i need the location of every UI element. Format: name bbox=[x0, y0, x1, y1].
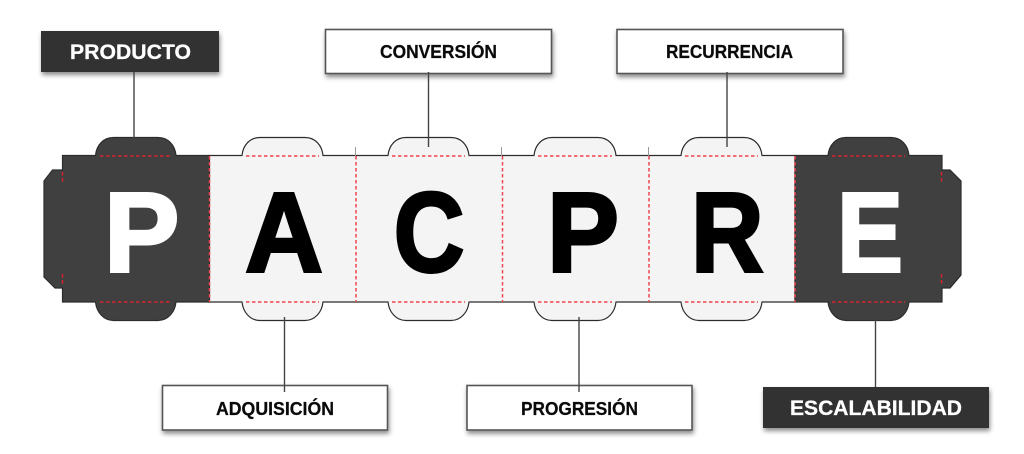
leader: ESCALABILIDAD bbox=[874, 318, 876, 387]
panel: dark right section E bbox=[795, 138, 961, 320]
label: RECURRENCIA: RECURRENCIA bbox=[666, 42, 793, 62]
letter A: A bbox=[245, 170, 323, 296]
label: ESCALABILIDAD: ESCALABILIDAD bbox=[790, 397, 962, 420]
label: PRODUCTO bbox=[41, 31, 219, 72]
label: ESCALABILIDAD bbox=[763, 387, 989, 428]
letter E: E bbox=[837, 170, 903, 296]
letter P: P bbox=[547, 170, 619, 296]
letter P: P bbox=[104, 170, 179, 296]
letter C: C bbox=[394, 170, 464, 296]
leader: PRODUCTO bbox=[133, 72, 135, 147]
leader: CONVERSIÓN bbox=[428, 72, 430, 147]
leader: PROGRESIÓN bbox=[578, 317, 580, 392]
label: PRODUCTO: PRODUCTO bbox=[70, 41, 191, 64]
leader: ADQUISICIÓN bbox=[284, 317, 286, 392]
label: ADQUISICIÓN bbox=[162, 386, 388, 430]
fold lines bbox=[62, 147, 942, 302]
label: ADQUISICIÓN: ADQUISICIÓN bbox=[216, 398, 334, 419]
panel: light centre band with tabs bbox=[209, 138, 795, 320]
label: PROGRESIÓN: PROGRESIÓN bbox=[521, 398, 638, 419]
label: PROGRESIÓN bbox=[467, 386, 692, 430]
panel: dark left section P bbox=[44, 138, 210, 320]
label: CONVERSIÓN bbox=[326, 30, 552, 74]
label: RECURRENCIA bbox=[617, 30, 843, 74]
letter R: R bbox=[691, 170, 764, 296]
leader: RECURRENCIA bbox=[726, 72, 728, 147]
label: CONVERSIÓN: CONVERSIÓN bbox=[380, 41, 497, 62]
